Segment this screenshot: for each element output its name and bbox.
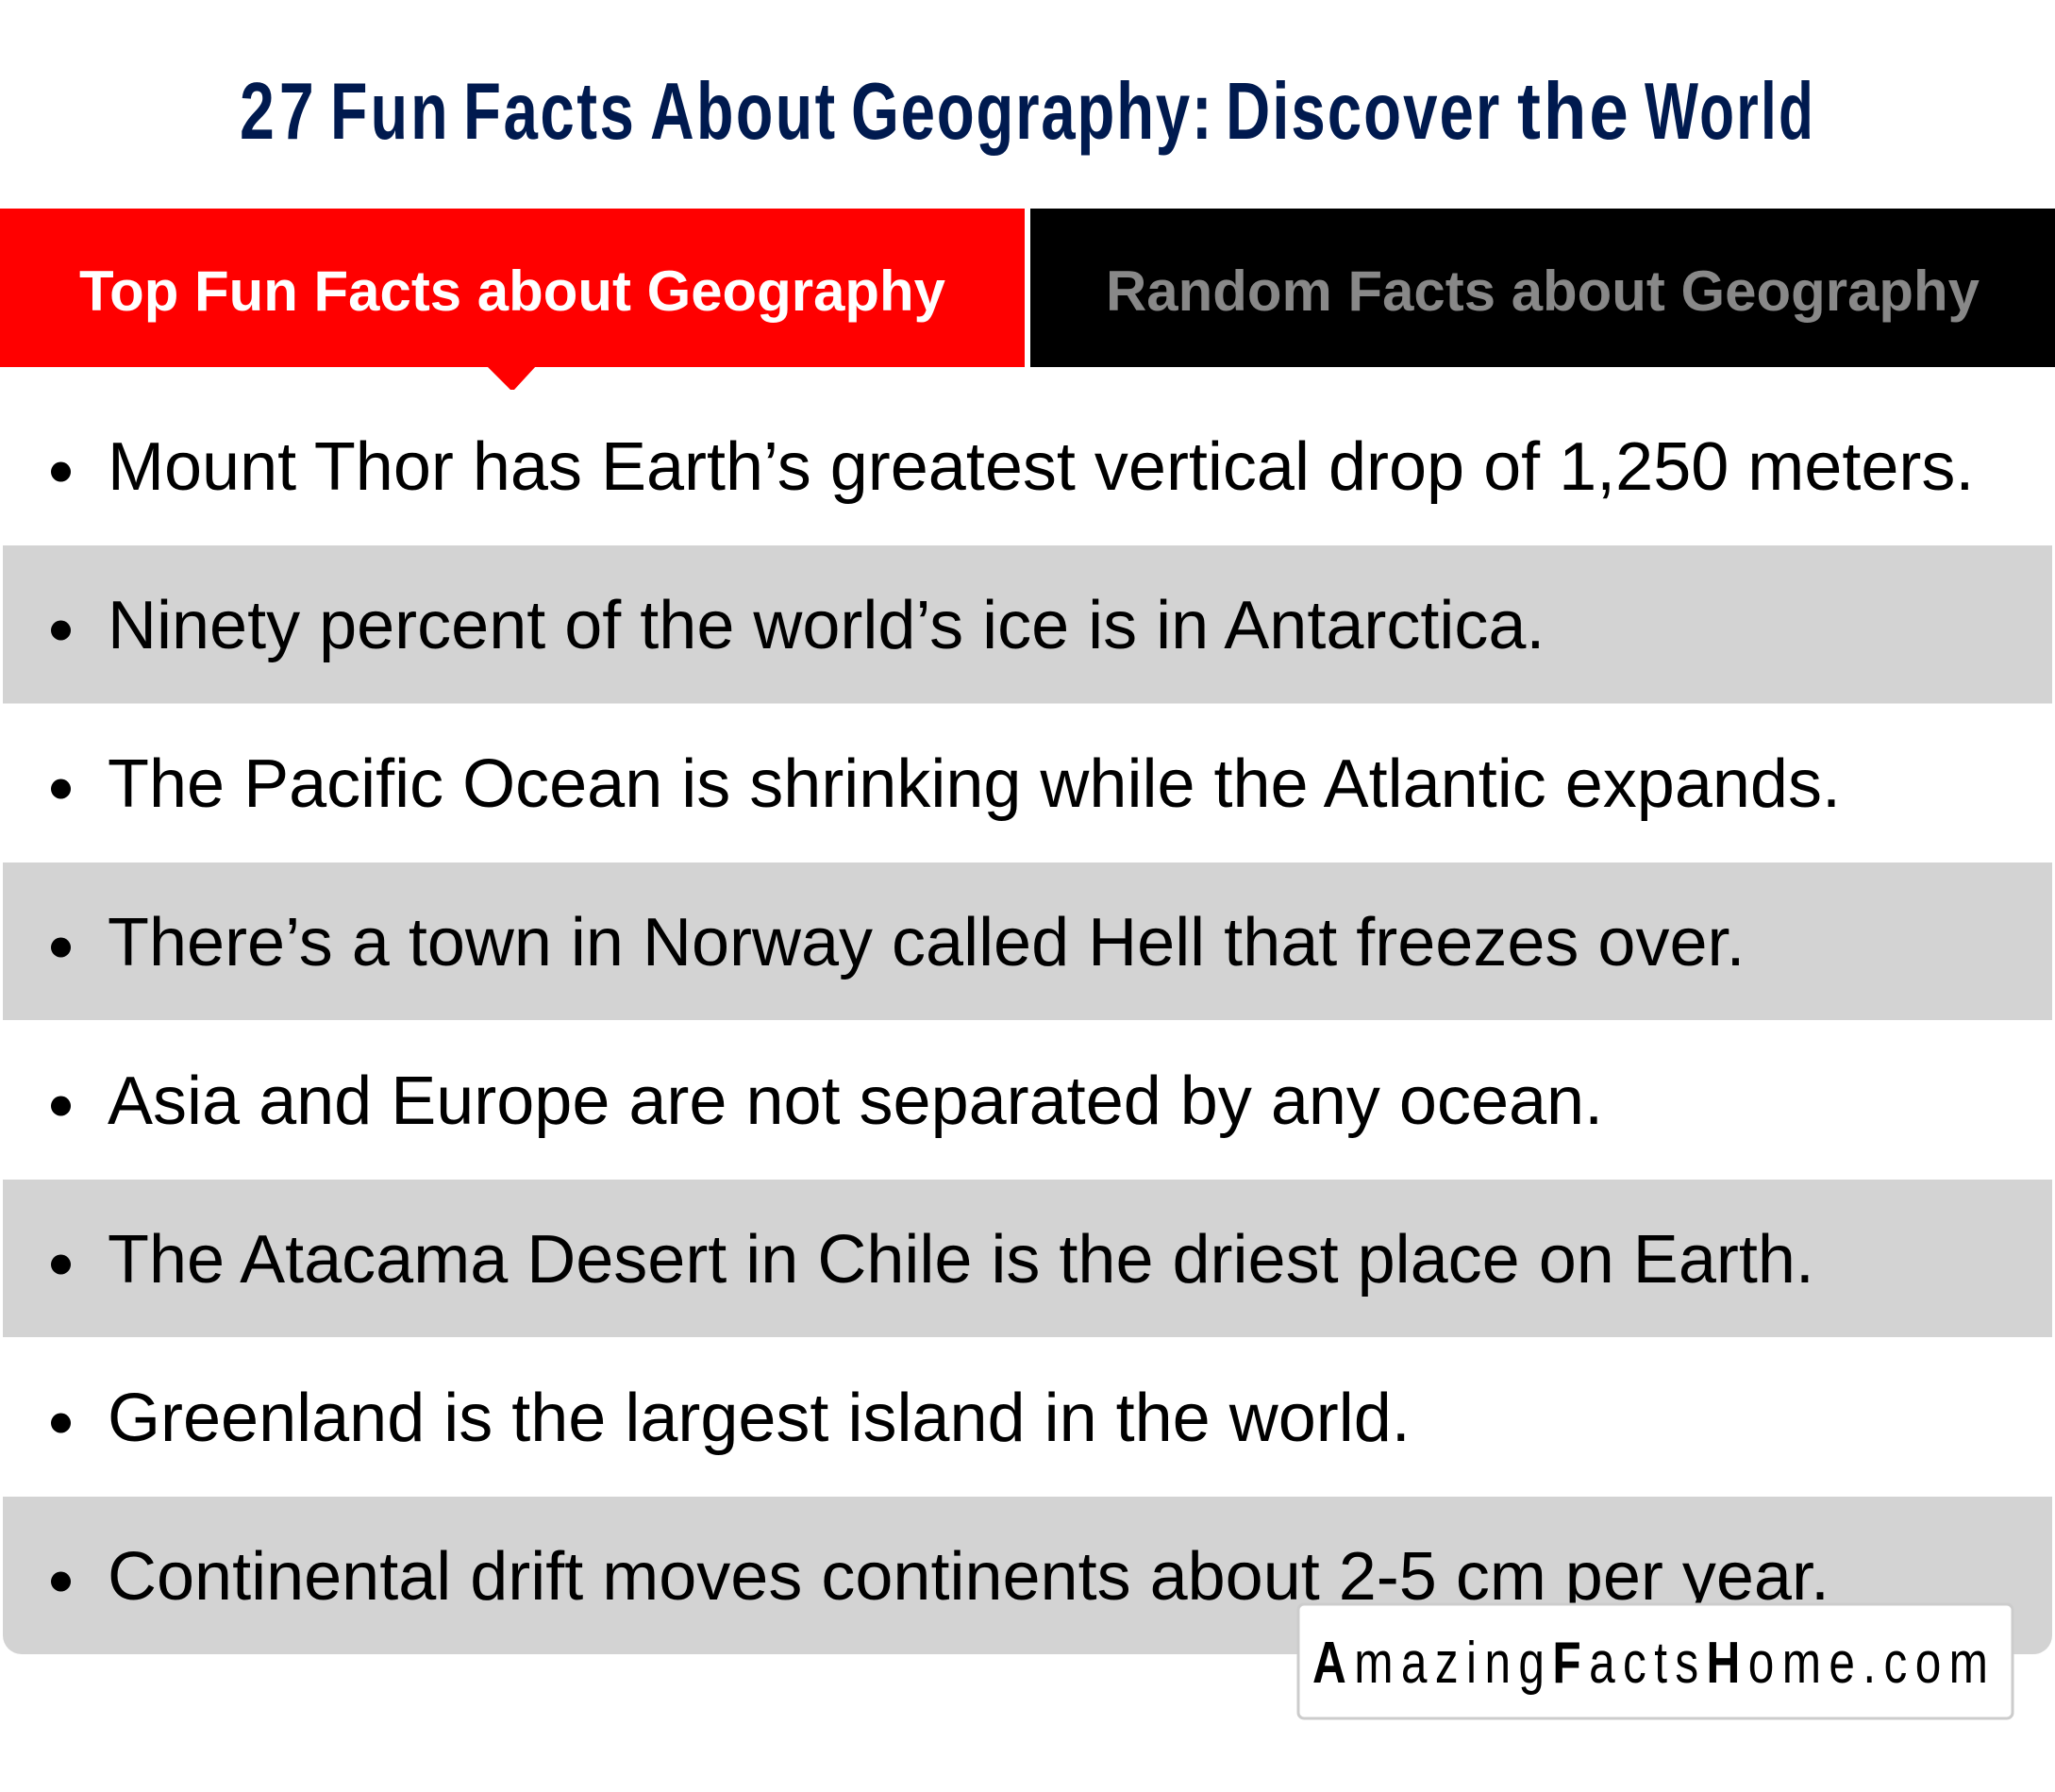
row 6: The Atacama Desert in Chile is the driest place on Earth.	[108, 1222, 1814, 1298]
row 8: Continental drift moves continents about 2-5 cm per year.	[108, 1539, 1829, 1615]
title: World	[1645, 66, 1813, 156]
watermark: AmazingFactsHome.com	[1312, 1630, 1988, 1695]
title: Fun	[330, 66, 448, 156]
row 2	[3, 545, 2052, 704]
title: 27	[240, 67, 314, 157]
row 6	[3, 1180, 2052, 1337]
tab: top fun facts (active): Top Fun Facts about Geography	[79, 260, 946, 323]
row 8	[3, 1497, 2052, 1654]
row 1: Mount Thor has Earth’s greatest vertical drop of 1,250 meters.	[108, 429, 1974, 505]
row 2: Ninety percent of the world’s ice is in Antarctica.	[108, 588, 1545, 663]
title: the	[1517, 67, 1629, 156]
row 3: The Pacific Ocean is shrinking while the Atlantic expands.	[108, 746, 1841, 822]
row 5: Asia and Europe are not separated by any ocean.	[108, 1063, 1603, 1139]
watermark	[1298, 1604, 2013, 1718]
row 4: There’s a town in Norway called Hell that freezes over.	[108, 905, 1746, 980]
tab: random facts (inactive): Random Facts about Geography	[1106, 260, 1980, 323]
row 4	[3, 863, 2052, 1020]
tab: top fun facts (active)	[0, 209, 1025, 390]
title: Geography:	[851, 67, 1212, 157]
title	[240, 66, 1813, 157]
title: About	[650, 66, 835, 156]
row 7: Greenland is the largest island in the world.	[108, 1381, 1411, 1456]
fact list	[3, 429, 2052, 1654]
title: Discover	[1226, 67, 1499, 157]
title: Facts	[463, 67, 634, 157]
tab: random facts (inactive)	[1030, 209, 2055, 367]
